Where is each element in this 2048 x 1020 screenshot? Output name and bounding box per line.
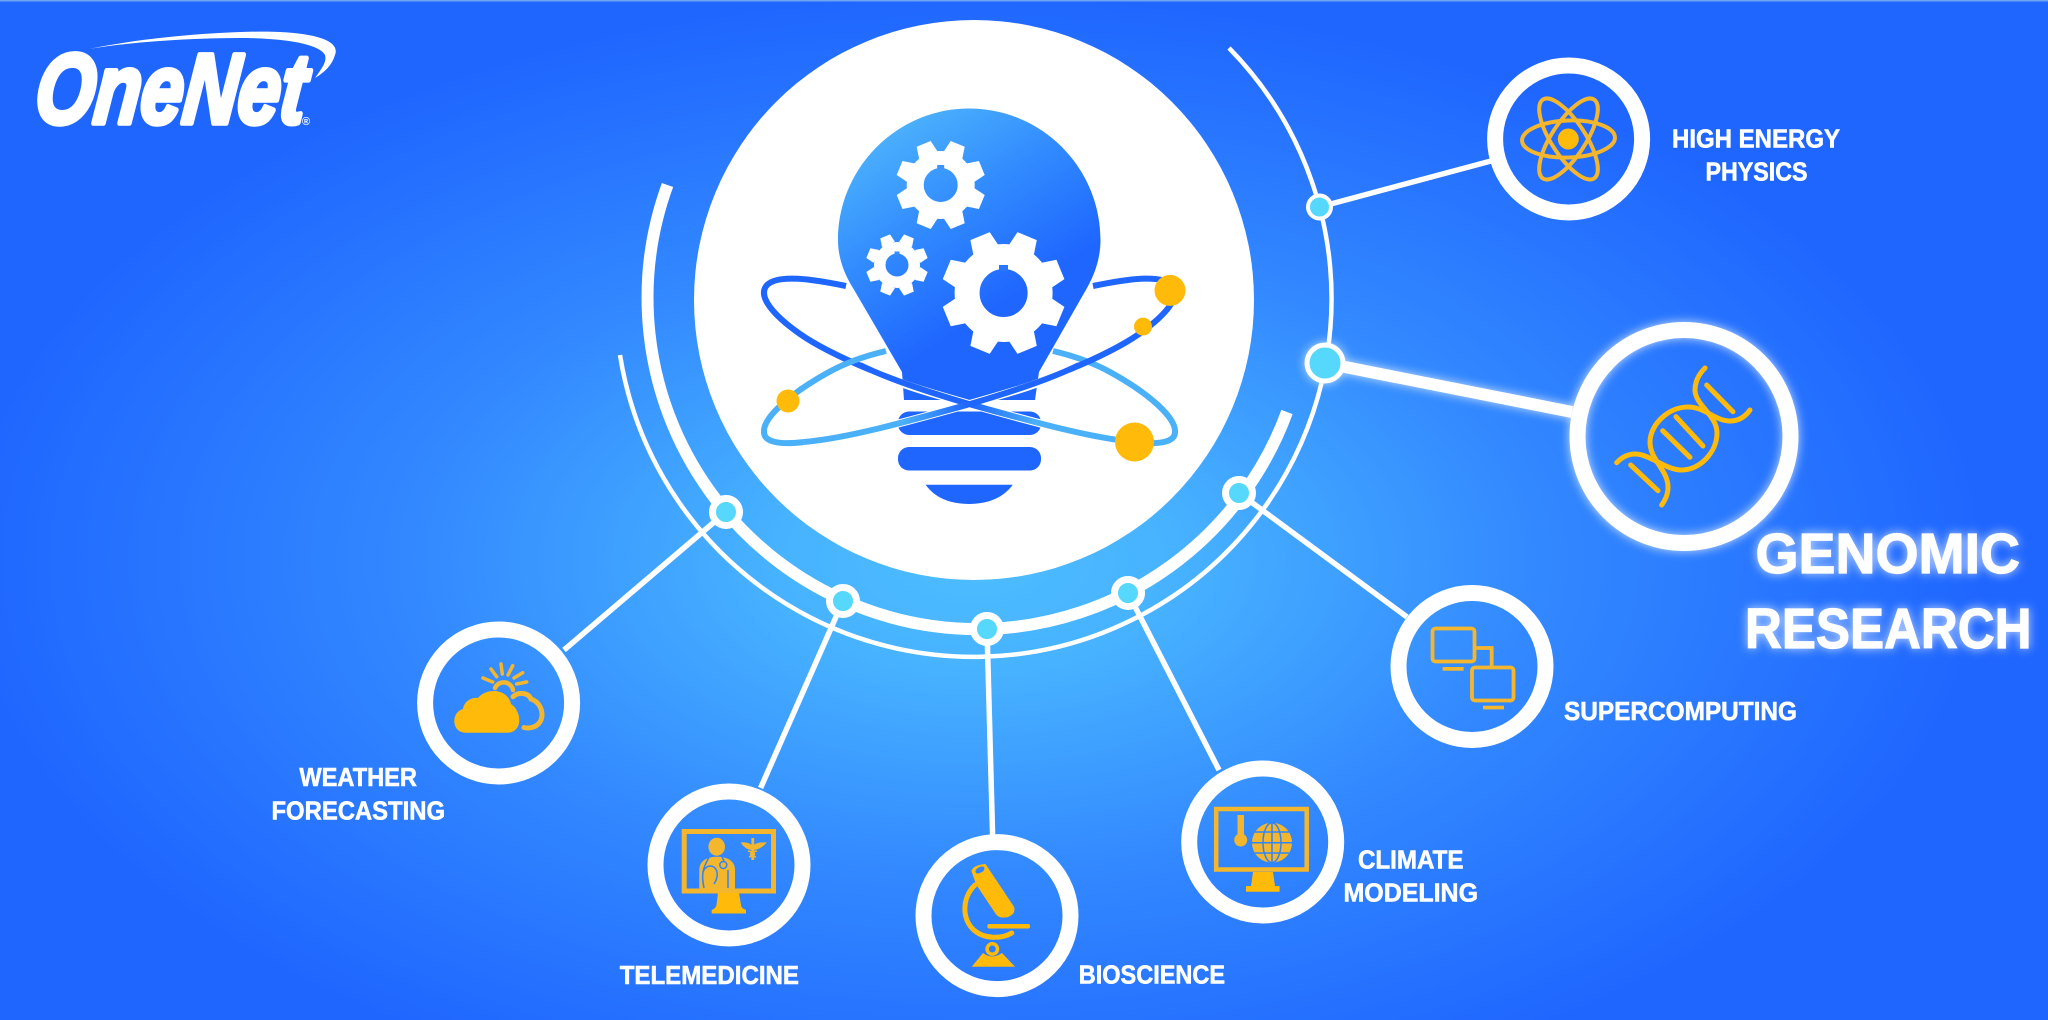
node: genomic research (highlighted) (1307, 330, 2032, 661)
icon: microscope (965, 865, 1030, 967)
icon: climate monitor (1216, 809, 1307, 892)
label: weather forecasting: FORECASTING (272, 795, 445, 825)
arc nodes (712, 196, 1331, 642)
glowing connector and ring (1307, 330, 1790, 543)
arc rings (620, 48, 1332, 657)
label: supercomputing: SUPERCOMPUTING (1564, 696, 1797, 726)
connector lines (564, 161, 1491, 835)
icon: sun and clouds (454, 664, 542, 733)
label: bioscience: BIOSCIENCE (1079, 960, 1225, 990)
node: climate modeling (1189, 768, 1478, 916)
bulb base bars (898, 412, 1041, 504)
label: climate modeling: MODELING (1344, 878, 1478, 908)
light bulb with gears and orbits (764, 108, 1186, 504)
node: bioscience (924, 842, 1225, 990)
label: weather forecasting: WEATHER (299, 762, 417, 792)
label: climate modeling (1344, 844, 1478, 908)
gear: small (866, 234, 928, 296)
logo: OneNet: ® (302, 116, 310, 128)
icon: telemedicine monitor (684, 832, 774, 914)
label: weather forecasting (272, 762, 445, 825)
icon: atom (1521, 90, 1616, 188)
label: genomic research (1745, 522, 2032, 661)
logo: OneNet: OneNet (31, 34, 315, 145)
central white circle (694, 20, 1254, 580)
gear: top (896, 140, 986, 230)
label: high energy physics: PHYSICS (1706, 156, 1808, 186)
node: weather forecasting (272, 630, 572, 825)
label: genomic research: GENOMIC (1756, 522, 2020, 586)
icon: linked computers (1432, 628, 1514, 709)
node: supercomputing (1398, 593, 1797, 740)
orbit front strands (804, 365, 1135, 442)
label: climate modeling: CLIMATE (1358, 844, 1464, 874)
node: high energy physics (1495, 66, 1840, 212)
bulb glass (838, 108, 1100, 400)
label: telemedicine: TELEMEDICINE (620, 960, 799, 990)
node: telemedicine (620, 792, 802, 990)
orbit back rings (764, 279, 1175, 443)
label: high energy physics: HIGH ENERGY (1672, 124, 1840, 154)
icon: DNA helix (1617, 368, 1750, 505)
gear: large (941, 231, 1066, 355)
label: high energy physics (1672, 124, 1840, 186)
orbit electrons (776, 275, 1186, 462)
